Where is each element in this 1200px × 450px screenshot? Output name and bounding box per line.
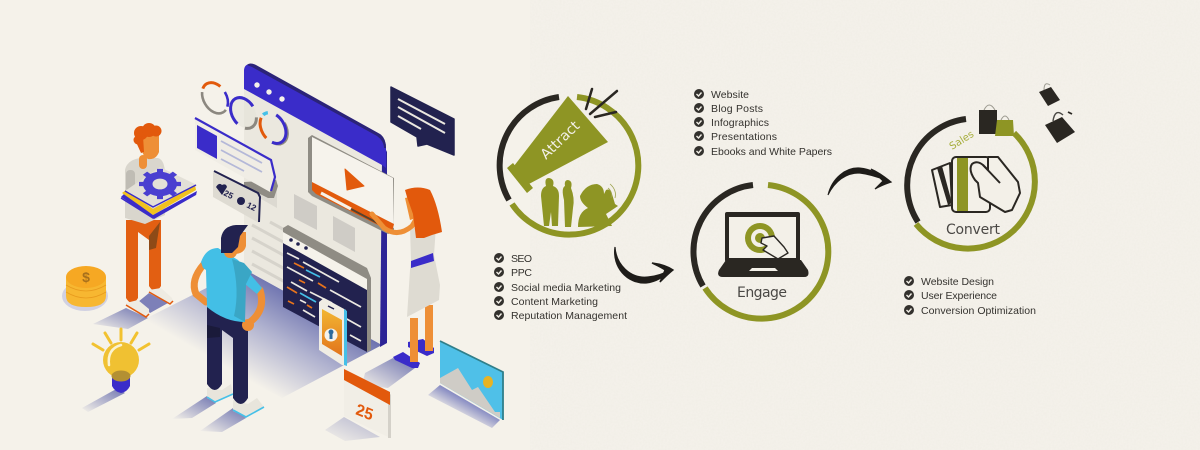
calendar: [325, 369, 391, 441]
code window: [283, 225, 371, 352]
list: engage: Website: [711, 89, 749, 101]
man in blue: [172, 225, 264, 432]
likes card: 12: [245, 200, 258, 213]
trousers: [207, 306, 248, 404]
floating bag small: [1039, 84, 1060, 106]
isometric illustration: [62, 64, 503, 441]
stage: engage: [693, 185, 828, 319]
calendar: 25: [354, 400, 375, 425]
convert label: Convert: [946, 222, 1000, 238]
coin stack: [62, 266, 108, 311]
donut three: [255, 107, 293, 149]
smartphone: [319, 298, 347, 366]
legs: [410, 318, 418, 362]
likes card: 25: [222, 188, 235, 201]
arms: [194, 264, 206, 302]
list: engage: Infographics: [711, 117, 769, 129]
arrow: engage to convert: [828, 168, 891, 195]
man with gear: [93, 123, 197, 329]
leg shadow: [138, 293, 168, 313]
picture card: [428, 341, 503, 428]
hair: [405, 188, 442, 238]
comment card: [195, 118, 278, 198]
audience silhouettes: [541, 178, 618, 227]
floating bag large: [1045, 112, 1075, 143]
credit cards and hand: [932, 157, 1020, 212]
list: convert: [904, 276, 1036, 317]
website board: [244, 64, 387, 347]
stage: attract: [500, 89, 638, 235]
list: attract: Social media Marketing: [511, 282, 621, 294]
engage label: Engage: [737, 285, 787, 301]
dress: [407, 226, 440, 317]
donut two: [225, 93, 262, 133]
engage ring: [693, 185, 828, 319]
sales label: Sales: [948, 129, 976, 153]
donut one: [197, 78, 233, 118]
speech bubble: [391, 87, 454, 155]
convert ring: [907, 119, 1035, 249]
laptop icon: [718, 212, 808, 277]
list: attract: Reputation Management: [511, 310, 627, 322]
list: engage: Presentations: [711, 131, 777, 143]
likes card: [213, 171, 260, 223]
gear: [139, 169, 181, 199]
list: attract: PPC: [511, 267, 532, 279]
list: convert: Conversion Optimization: [921, 305, 1036, 317]
shirt: [201, 248, 262, 322]
sound lines: [586, 89, 617, 117]
neck: [405, 196, 416, 220]
signal arcs: [608, 184, 615, 198]
list: attract: [494, 253, 627, 322]
shopping bags: [979, 105, 1014, 136]
megaphone: [507, 96, 608, 193]
light bulb: [82, 329, 149, 412]
attract ring: [500, 97, 638, 235]
arrow: attract to engage: [615, 247, 673, 283]
shoes: [207, 384, 233, 402]
woman: [362, 188, 442, 388]
shoes: [408, 339, 434, 356]
floor shadow: [137, 269, 382, 398]
stage: convert: [907, 105, 1035, 249]
list: convert: User Experience: [921, 290, 997, 302]
attract label: Attract: [538, 118, 584, 163]
list: convert: Website Design: [921, 276, 994, 288]
head: [224, 245, 237, 258]
pants: [126, 220, 161, 303]
video player: [308, 135, 394, 234]
shoes: [126, 300, 149, 317]
list: attract: Content Marketing: [511, 296, 598, 308]
list: engage: Blog Posts: [711, 103, 763, 115]
list: attract: SEO: [511, 253, 532, 265]
donut charts: [197, 78, 293, 149]
arm: [372, 214, 418, 233]
tray: [121, 191, 197, 219]
list: engage: Ebooks and White Papers: [711, 146, 832, 158]
torso: [125, 158, 165, 224]
coin stack: $: [82, 269, 90, 285]
list: engage: [694, 89, 832, 158]
head: [139, 155, 147, 169]
